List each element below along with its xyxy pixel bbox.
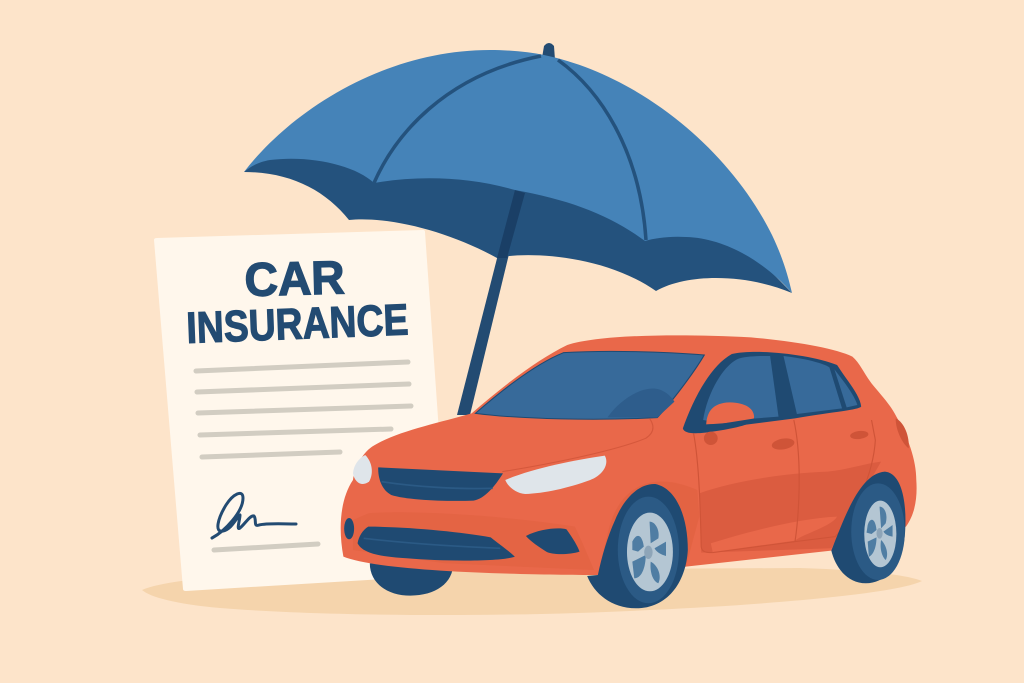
tail light — [896, 418, 909, 448]
front side window — [703, 356, 779, 422]
door handles — [771, 437, 796, 451]
ground shadow — [142, 568, 922, 615]
windshield — [475, 351, 704, 419]
rear side window — [783, 356, 842, 414]
right rib — [558, 60, 646, 240]
front wheel — [587, 484, 688, 608]
canopy underside — [244, 130, 792, 293]
lower grille — [358, 527, 515, 561]
car — [341, 335, 917, 608]
bumper shade — [353, 512, 594, 570]
windshield reflection — [607, 389, 674, 418]
text lines — [196, 362, 411, 550]
document title — [186, 250, 409, 353]
quarter window — [834, 369, 857, 407]
side mirror — [706, 402, 754, 424]
lower grille slat — [364, 538, 500, 548]
umbrella top knob — [542, 43, 555, 60]
rear spokes — [867, 507, 893, 560]
lower body shade — [699, 462, 881, 553]
left rib — [374, 56, 541, 183]
umbrella pole — [457, 188, 525, 415]
rear hub — [864, 501, 896, 567]
signature — [212, 493, 296, 538]
car body — [341, 335, 917, 575]
insurance document — [154, 230, 449, 591]
rocker highlight — [711, 517, 837, 552]
wheel arch highlight front — [598, 482, 699, 575]
fog lamp left — [344, 518, 354, 539]
left headlight — [353, 455, 372, 484]
pole under canopy — [497, 190, 525, 258]
rear hub cap — [876, 528, 883, 539]
upper grille slat — [382, 482, 493, 489]
title line: CAR: CAR — [244, 250, 345, 306]
front spokes — [632, 522, 666, 583]
front tyre face — [618, 497, 679, 603]
front hub cap — [644, 546, 653, 559]
front hub — [627, 513, 673, 591]
door seams — [694, 420, 875, 553]
front tyre — [587, 484, 688, 608]
upper grille — [378, 467, 503, 501]
rear tyre — [831, 472, 905, 583]
fog lamp right — [526, 528, 580, 554]
umbrella — [244, 43, 792, 415]
side window frame — [683, 352, 861, 433]
rear tyre face — [851, 483, 905, 580]
title line: INSURANCE: INSURANCE — [186, 296, 409, 353]
mirror base — [703, 418, 755, 433]
right headlight — [505, 456, 606, 494]
hood crease — [502, 418, 653, 472]
canopy top — [244, 50, 792, 293]
rear wheel — [831, 472, 905, 583]
far front tyre — [370, 563, 453, 596]
paper sheet — [154, 230, 449, 591]
